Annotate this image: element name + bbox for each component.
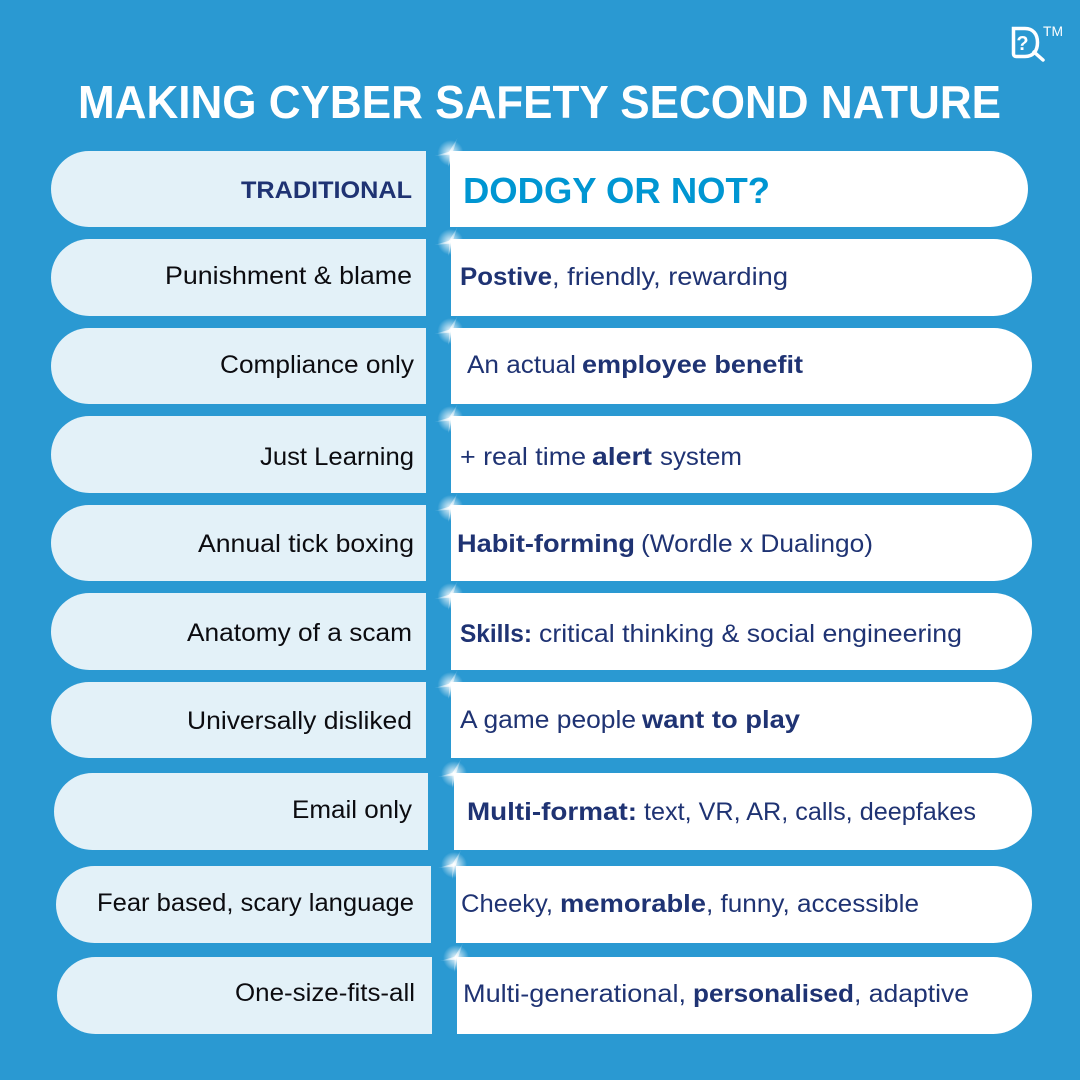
row 8 right xyxy=(438,850,1032,943)
row 8 right: , funny, accessible xyxy=(706,890,919,918)
row 1 left: Punishment & blame xyxy=(165,262,412,290)
row 3 right: alert xyxy=(592,443,653,471)
row 5 left: Anatomy of a scam xyxy=(187,619,412,647)
row 2 left xyxy=(51,328,426,404)
row 7 right xyxy=(438,759,1032,850)
row 6 right: A game people xyxy=(460,706,636,734)
logo: magnifier with question mark and TM xyxy=(1014,24,1063,60)
row 7 right: text, VR, AR, calls, deepfakes xyxy=(644,798,976,826)
row 8 right: memorable xyxy=(560,890,706,918)
row 7 left: Email only xyxy=(292,796,413,824)
row 3 right: + real time xyxy=(460,443,586,471)
row 9 right: Multi-generational, xyxy=(463,980,686,1008)
header row right: dodgy or not xyxy=(434,138,1028,227)
logo: magnifier with question mark and TM: ? xyxy=(1016,33,1029,55)
row 2 left: Compliance only xyxy=(220,351,415,379)
logo: magnifier with question mark and TM: TM xyxy=(1043,24,1063,39)
row 8 left: Fear based, scary language xyxy=(97,889,414,917)
row 1 right: , friendly, rewarding xyxy=(552,263,788,291)
row 9 right xyxy=(440,943,1032,1034)
row 9 right: personalised xyxy=(693,980,854,1008)
row 3 left xyxy=(51,416,426,493)
row 6 right: want to play xyxy=(641,706,800,734)
row 1 right xyxy=(434,227,1032,316)
row 6 right xyxy=(434,670,1032,758)
row 4 left xyxy=(51,505,426,581)
row 5 right xyxy=(434,581,1032,670)
row 3 left: Just Learning xyxy=(260,443,414,471)
row 5 right: Skills: xyxy=(460,620,532,648)
row 8 right: Cheeky, xyxy=(461,890,553,918)
row 7 left xyxy=(54,773,428,850)
row 8 left xyxy=(56,866,431,943)
row 5 left xyxy=(51,593,426,670)
row 4 left: Annual tick boxing xyxy=(198,530,414,558)
row 3 right xyxy=(434,404,1032,493)
row 1 left xyxy=(51,239,426,316)
row 7 right: Multi-format: xyxy=(467,798,637,826)
row 6 left xyxy=(51,682,426,758)
row 4 right: (Wordle x Dualingo) xyxy=(641,530,873,558)
row 9 right: , adaptive xyxy=(854,980,969,1008)
row 2 right xyxy=(434,316,1032,404)
row 2 right: employee benefit xyxy=(582,351,804,379)
title: MAKING CYBER SAFETY SECOND NATURE xyxy=(78,76,1001,128)
row 3 right: system xyxy=(660,443,742,471)
row 6 left: Universally disliked xyxy=(187,707,412,735)
header row left: traditional: TRADITIONAL xyxy=(241,177,412,204)
row 9 left xyxy=(57,957,432,1034)
row 5 right: critical thinking & social engineering xyxy=(539,620,962,648)
header row left: traditional xyxy=(51,151,426,227)
row 4 right: Habit-forming xyxy=(457,530,635,558)
row 1 right: Postive xyxy=(460,263,552,291)
header row right: dodgy or not: DODGY OR NOT? xyxy=(463,170,770,211)
row 4 right xyxy=(434,493,1032,581)
row 2 right: An actual xyxy=(467,351,576,379)
row 9 left: One-size-fits-all xyxy=(235,979,415,1007)
